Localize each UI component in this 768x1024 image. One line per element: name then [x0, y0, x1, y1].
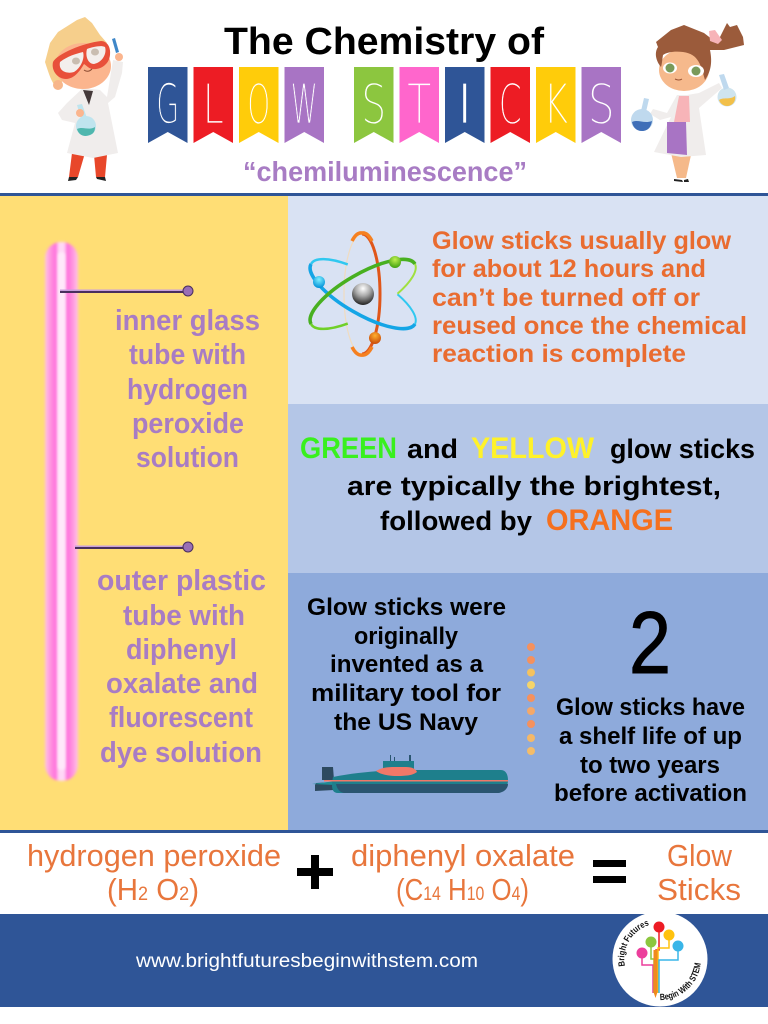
equation: product glow sticks	[657, 838, 741, 907]
text: shelf life: a shelf life of up	[559, 723, 742, 750]
text: military origin: the US Navy	[334, 709, 479, 736]
text: inner tube label: peroxide	[132, 408, 244, 440]
text: military origin: military tool for	[311, 680, 501, 707]
text: military origin: originally	[354, 623, 459, 650]
panel: history and shelf life	[288, 573, 768, 830]
icon: atom	[301, 233, 424, 355]
equation: equals sign	[593, 860, 626, 883]
number: shelf life years: 2	[629, 593, 671, 692]
panel: yellow glow stick panel	[0, 196, 288, 830]
text: glow duration: reused once the chemical	[432, 312, 747, 340]
text: glow duration: for about 12 hours and	[432, 255, 706, 283]
logo: Begin With STEM	[660, 962, 701, 1000]
banner: glow sticks letters: L	[203, 73, 224, 136]
equation: reactant hydrogen peroxide: (H2 O2)	[107, 872, 199, 907]
text: outer tube label: dye solution	[100, 737, 262, 769]
text: military origin: Glow sticks were	[307, 594, 506, 621]
text: brightness: GREEN	[300, 432, 397, 465]
text: glow duration: can’t be turned off or	[432, 284, 700, 312]
banner: glow sticks letters: T	[407, 73, 431, 136]
banner: glow sticks letters	[148, 67, 621, 143]
banner: glow sticks letters: I	[453, 73, 476, 136]
equation: plus sign	[297, 855, 333, 889]
banner: glow sticks letters: S	[588, 73, 615, 136]
panel: brightness	[288, 404, 768, 573]
text: brightness: glow sticks	[610, 434, 755, 464]
text: outer tube label: tube with	[123, 600, 245, 632]
text: inner tube label: hydrogen	[127, 374, 248, 406]
logo: Bright Futures	[618, 921, 649, 966]
text: brightness: followed by	[380, 506, 532, 536]
text: shelf life: before activation	[554, 780, 747, 807]
text: shelf life	[554, 694, 747, 807]
text: outer tube label: fluorescent	[109, 702, 253, 734]
subtitle: “chemiluminescence”	[243, 156, 527, 187]
banner: glow sticks letters: O	[247, 73, 270, 136]
equation: reactant hydrogen peroxide	[27, 838, 281, 907]
footer band	[0, 914, 768, 1007]
equation: reactant diphenyl oxalate	[351, 838, 575, 907]
callout line: outer tube	[75, 542, 193, 552]
icon: glow stick	[45, 242, 78, 781]
text: outer tube label	[97, 565, 266, 769]
callout line: inner tube	[60, 286, 193, 296]
text: shelf life: Glow sticks have	[556, 694, 745, 721]
banner: glow sticks letters: W	[291, 73, 318, 136]
text: shelf life: to two years	[580, 752, 720, 779]
text: inner tube label: solution	[136, 442, 239, 474]
text: brightness	[300, 432, 755, 537]
text: brightness: YELLOW	[471, 432, 595, 465]
text: outer tube label: diphenyl	[126, 634, 237, 666]
text: brightness: ORANGE	[546, 504, 673, 537]
equation: reactant diphenyl oxalate: (C14 H10 O4)	[396, 872, 529, 907]
text: military origin: invented as a	[330, 651, 484, 678]
footer website: www.brightfuturesbeginwithstem.com	[135, 951, 478, 972]
divider dots	[527, 643, 535, 755]
equation: reactant hydrogen peroxide: hydrogen peroxide	[27, 838, 281, 873]
text: outer tube label: outer plastic	[97, 565, 266, 597]
text: inner tube label: tube with	[129, 339, 246, 371]
icon: submarine	[312, 755, 508, 793]
equation: product glow sticks: Sticks	[657, 872, 741, 907]
equation: product glow sticks: Glow	[667, 838, 733, 873]
banner: glow sticks letters: G	[156, 73, 179, 136]
banner: glow sticks letters: C	[499, 73, 522, 136]
banner: glow sticks letters: K	[543, 73, 568, 136]
banner: glow sticks letters: S	[361, 73, 386, 136]
text: glow duration	[432, 227, 747, 368]
text: inner tube label: inner glass	[115, 305, 260, 337]
text: military origin	[307, 594, 506, 736]
icon: girl scientist	[631, 23, 744, 182]
text: brightness: and	[407, 434, 458, 464]
title: The Chemistry of	[224, 21, 544, 63]
text: glow duration: reaction is complete	[432, 340, 686, 368]
equation: reactant diphenyl oxalate: diphenyl oxalate	[351, 838, 575, 873]
icon: boy scientist	[45, 17, 123, 181]
text: inner tube label	[115, 305, 260, 474]
text: brightness: are typically the brightest,	[347, 471, 721, 501]
logo	[612, 914, 708, 1006]
text: glow duration: Glow sticks usually glow	[432, 227, 732, 255]
text: outer tube label: oxalate and	[106, 668, 258, 700]
panel: glow duration	[288, 196, 768, 404]
